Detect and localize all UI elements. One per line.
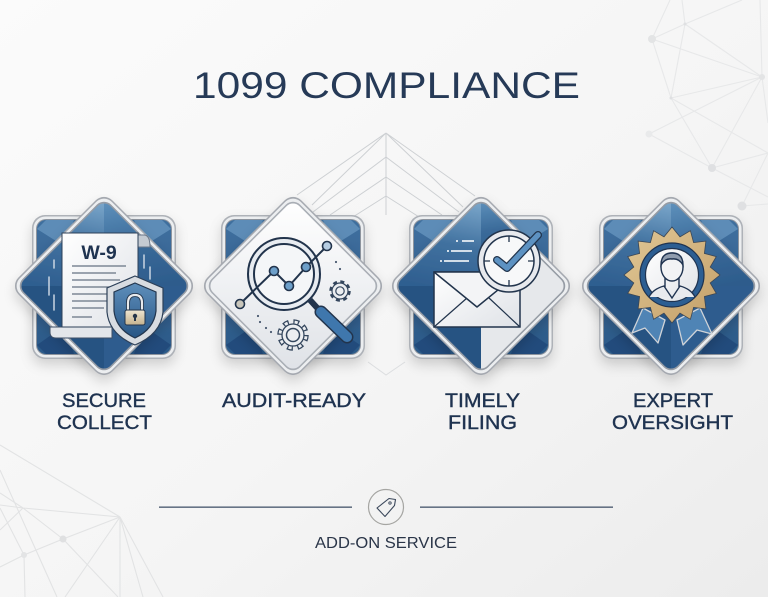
network pattern bottom left (0, 445, 163, 597)
diamond (10, 192, 198, 380)
network pattern top right (646, 0, 768, 210)
back square (32, 215, 176, 359)
shield with lock (107, 276, 163, 345)
label: expert oversight (612, 391, 733, 434)
diamond (387, 192, 575, 380)
document: W-9 (81, 242, 117, 264)
label: secure collect: SECURE (62, 391, 146, 412)
badge: secure collect (10, 192, 198, 380)
line chart (236, 242, 332, 308)
speed marks (49, 255, 150, 310)
add-on divider left (159, 506, 352, 508)
label: secure collect (57, 391, 152, 434)
document (50, 233, 150, 338)
badge: timely filing (387, 192, 575, 380)
badge: audit-ready (199, 192, 387, 380)
label: timely filing: FILING (448, 413, 517, 434)
clock with check (478, 230, 540, 292)
title: 1099 COMPLIANCE (193, 65, 580, 106)
badge: expert oversight (577, 192, 765, 380)
label: audit-ready: AUDIT-READY (222, 391, 366, 412)
label: timely filing: TIMELY (445, 391, 520, 412)
back square (599, 215, 743, 359)
back square (409, 215, 553, 359)
speed lines (440, 241, 474, 261)
icon: price tag (368, 490, 404, 524)
label: expert oversight: EXPERT (633, 391, 713, 412)
diamond (577, 192, 765, 380)
envelope (434, 272, 520, 327)
dots (257, 261, 341, 333)
add-on divider right (420, 506, 613, 508)
ribbons (632, 308, 712, 345)
gear large (280, 322, 306, 348)
person (649, 253, 695, 298)
gear small (332, 282, 348, 300)
rosette (624, 227, 720, 323)
label: timely filing (445, 391, 520, 434)
back square (221, 215, 365, 359)
magnifier lens (248, 238, 347, 337)
add-on service label: ADD-ON SERVICE (315, 535, 457, 552)
label: expert oversight: OVERSIGHT (612, 413, 733, 434)
diamond (199, 192, 387, 380)
label: secure collect: COLLECT (57, 413, 152, 434)
center chevron lines behind badges (297, 133, 475, 375)
